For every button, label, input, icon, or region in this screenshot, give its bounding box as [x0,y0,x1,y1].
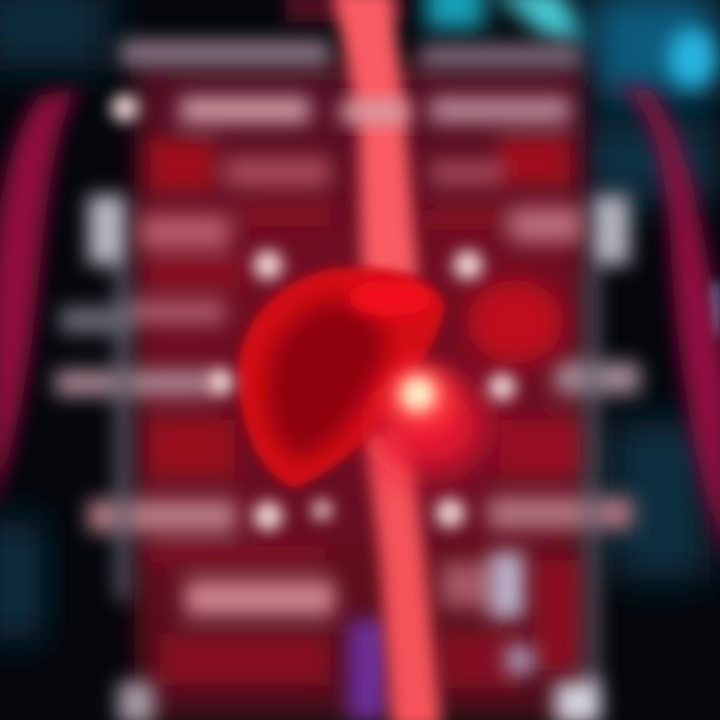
text rows: left column [55,40,335,685]
right crimson band [610,85,720,570]
glowing gallbladder [372,365,488,475]
body panel [135,60,585,720]
central vertical vessel: lower [365,430,442,720]
side vertical grey bars [88,195,630,720]
right organ lobe [467,280,563,364]
callout nodes [111,94,516,531]
vessel highlight band [340,100,410,124]
liver [238,267,444,488]
left crimson band [0,88,85,510]
central vertical vessel: upper [332,0,418,280]
purple lower organ [348,620,388,720]
text rows: right column [420,44,640,688]
